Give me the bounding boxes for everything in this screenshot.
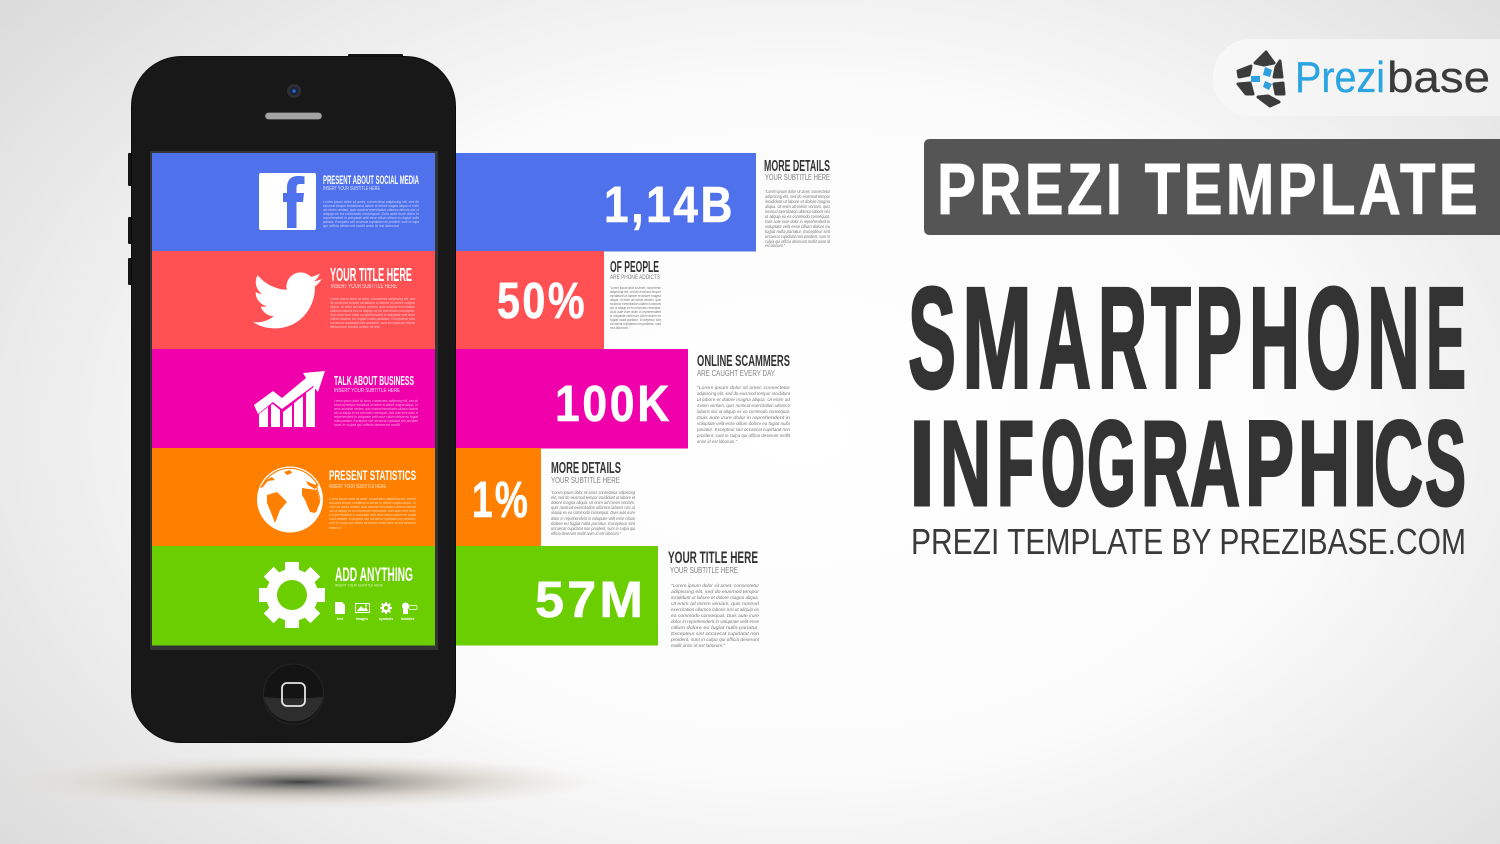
callout: your title here (green): Excepteur sint occaecat cupidatat non [671, 631, 760, 636]
callout: more details (orange): dolore eu fugiat nulla pariatur. Excepteur sint [551, 521, 636, 526]
callout: of people (red): in voluptate velit esse cillum dolore eu [610, 314, 662, 318]
title: A [1190, 395, 1240, 531]
callout: more details (orange): aliquip ex ea commodo consequat. Duis aute irure [551, 510, 635, 515]
callout: more details (orange): MORE DETAILS [551, 460, 621, 477]
panel text [329, 467, 417, 530]
title: H [1249, 258, 1300, 418]
callout: your title here (green) [668, 548, 760, 648]
panel text: Duis aute irure dolor in reprehenderit in voluptate velit esse [330, 313, 415, 317]
panel text: occaecat cupidatat non proident, sunt in culpa qui officia [330, 321, 415, 325]
panel text: Lorem ipsum dolor sit amet, consectetur adipiscing elit, sed do [323, 200, 419, 204]
stat bar: red 50%: 50% [497, 272, 587, 329]
callout: online scammers (magenta): laboris nisi ut aliquip ex ea commodo consequat. [697, 409, 790, 414]
phone body [132, 56, 456, 742]
callout: of people (red): fugiat nulla pariatur. Excepteur sint [610, 318, 662, 322]
callout: more details (orange) [551, 460, 636, 536]
title: P [1245, 395, 1294, 531]
panel text: nulla pariatur. Excepteur sint occaecat cupidatat non proident [334, 419, 419, 423]
icon: facebook [259, 173, 316, 230]
callout: your title here (green): ea commodo consequat. Duis aute irure [671, 613, 760, 618]
panel text: INSERT YOUR SUBTITLE HERE [329, 484, 386, 490]
stat bar: red 50% [440, 251, 604, 350]
stat bar: blue 1,14B: 1,14B [604, 176, 735, 233]
callout: your title here (green): Ut enim ad minim veniam, quis nostrud [671, 601, 760, 606]
panel text: Lorem ipsum dolor sit amet, consectetur adipiscing elit, sed do [334, 399, 418, 403]
panel text [322, 173, 420, 228]
callout: more details (orange): YOUR SUBTITLE HERE [551, 475, 620, 485]
callout: of people (red) [610, 259, 662, 330]
screen frame [150, 151, 438, 650]
panel text [335, 565, 413, 588]
callout: your title here (green): "Lorem ipsum dolor sit amet, consectetur [671, 583, 760, 588]
callout: more details (blue): nostrud exercitation ullamco laboris nisi [765, 209, 831, 214]
panel text: sunt in culpa qui officia deserunt mollit [334, 423, 401, 427]
stat bar: magenta 100K [440, 349, 688, 448]
panel text: enim ad minim veniam, quis nostrud exercitation ullamco laboris [334, 407, 418, 411]
callout: online scammers (magenta): Duis aute irure dolor in reprehenderit in [697, 415, 791, 420]
panel text: INSERT YOUR SUBTITLE HERE [334, 388, 400, 394]
callout: of people (red): aliqua. Ut enim ad minim veniam, quis [610, 298, 661, 302]
callout: online scammers (magenta) [696, 353, 791, 444]
panel text: PRESENT ABOUT SOCIAL MEDIA [323, 173, 419, 187]
title: G [1087, 395, 1136, 531]
title: M [962, 258, 1032, 418]
callout: more details (blue): adipiscing elit, sed do eiusmod tempor [765, 194, 830, 199]
callout: more details (blue): occaecat cupidatat non proident, sunt in [765, 234, 830, 239]
callout: your title here (green): adipiscing elit, sed do eiusmod tempor [671, 589, 760, 594]
stat bar: green 57M [440, 546, 658, 646]
panel text: deserunt mollit anim id est [330, 325, 381, 329]
callout: more details (orange): dolor in reprehenderit in voluptate velit esse cillum [551, 516, 635, 521]
callout: online scammers (magenta): anim id est laborum." [697, 439, 737, 444]
logo background pill [1213, 39, 1500, 116]
callout: your title here (green): YOUR TITLE HERE [668, 548, 758, 567]
title: R [1098, 258, 1147, 418]
stat bar: magenta 100K: 100K [555, 375, 672, 432]
callout: more details (blue): est laborum." [765, 243, 785, 248]
panel text: eiusmod tempor incididunt ut labore et dolore magna aliqua. Ut [334, 403, 419, 407]
panel text: ADD ANYTHING [335, 565, 413, 586]
stat bar: blue 1,14B [440, 153, 756, 252]
panel text: INSERT YOUR SUBTITLE HERE [335, 582, 383, 588]
panel text: ad minim veniam, quis nostrud exercitation ullamco laboris nisi ut [323, 208, 420, 212]
callout: your title here (green): exercitation ullamco laboris nisi ut aliquip ex [671, 607, 760, 612]
phone shadow [0, 755, 600, 809]
panel text: TALK ABOUT BUSINESS [334, 374, 414, 388]
callout: of people (red): occaecat cupidatat non proident, sunt [610, 322, 662, 326]
callout: online scammers (magenta): minim veniam, quis nostrud exercitation ullamco [697, 403, 791, 408]
title: O [1041, 395, 1085, 531]
callout: of people (red): ARE PHONE ADDICTS [610, 274, 660, 281]
colored stat bars [440, 153, 756, 646]
logo: prezibase [1213, 39, 1500, 116]
callout: online scammers (magenta): ARE CAUGHT EVERY DAY [697, 368, 775, 378]
callout: your title here (green): mollit anim id est laborum." [671, 643, 725, 648]
icon: globe [257, 466, 323, 532]
logo wordmark: base [1387, 53, 1490, 102]
camera [287, 84, 301, 98]
callout: online scammers (magenta): voluptate velit esse cillum dolore eu fugiat nulla [697, 421, 791, 426]
icon: twitter bird [253, 272, 322, 328]
callout: more details (blue): aliqua. Ut enim ad minim veniam, quis [765, 204, 831, 209]
panel text: enim ad minim veniam, quis nostrud exercitation ullamco laboris [329, 505, 416, 509]
callout: more details (blue): MORE DETAILS [764, 158, 830, 175]
title: H [1298, 395, 1350, 531]
panel text: nisi ut aliquip ex ea commodo consequat. Duis aute irure dolor in [334, 411, 418, 415]
title: R [1141, 395, 1189, 531]
title [908, 258, 1466, 531]
callout: of people (red): OF PEOPLE [610, 259, 659, 276]
title: I [1352, 395, 1378, 531]
callout: more details (orange): elit, sed do eiusmod tempor incididunt ut labore et [551, 495, 636, 500]
screen panel: business [152, 349, 435, 448]
callout: more details (blue): "Lorem ipsum dolor sit amet, consectetur [765, 189, 830, 194]
callout: online scammers (magenta): pariatur. Excepteur sint occaecat cupidatat non [696, 427, 791, 432]
home button [264, 664, 324, 724]
screen panel: add anything [152, 546, 435, 646]
panel text: YOUR TITLE HERE [330, 265, 412, 285]
panel text: Lorem ipsum dolor sit amet, consectetur adipiscing elit, sed do [329, 497, 416, 501]
icon: gear [259, 562, 325, 628]
title: N [940, 395, 991, 531]
callout: more details (blue): culpa qui officia deserunt mollit anim id [765, 239, 830, 244]
callout: your title here (green): proident, sunt in culpa qui officia deserunt [670, 637, 760, 642]
icon: logo star [1238, 52, 1284, 106]
callout: of people (red): nisi ut aliquip ex ea commodo consequat. [610, 306, 661, 310]
callout: online scammers (magenta): ONLINE SCAMMERS [697, 353, 790, 370]
logo wordmark: Prezi [1295, 53, 1385, 102]
callout: of people (red): adipiscing elit, sed do eiusmod tempor [610, 290, 662, 294]
title: P [1195, 258, 1242, 418]
panel text: ullamco laboris nisi ut aliquip ex ea commodo consequat. [330, 309, 415, 313]
panel text [330, 265, 416, 329]
panel text: in reprehenderit in voluptate velit esse cillum dolore eu fugiat [329, 513, 417, 517]
callout: more details (blue): fugiat nulla pariatur. Excepteur sint [765, 229, 831, 234]
callout: your title here (green): YOUR SUBTITLE HERE [670, 566, 738, 575]
callout: online scammers (magenta): proident, sunt in culpa qui officia deserunt mollit [696, 433, 791, 438]
callout: more details (blue): YOUR SUBTITLE HERE [765, 172, 830, 182]
title: T [1151, 258, 1191, 418]
callout: more details (orange): "Lorem ipsum dolor sit amet, consectetur adipiscing [551, 490, 635, 495]
panel text: nisi ut aliquip ex ea commodo consequat. Duis aute irure dolor [329, 509, 417, 513]
panel text: nulla pariatur. Excepteur sint occaecat cupidatat non proident, [329, 517, 416, 521]
title: N [1367, 258, 1420, 418]
callout: of people (red): "Lorem ipsum dolor sit amet, consectetur [610, 286, 662, 290]
callout: more details (blue): incididunt ut labore et dolore magna [765, 199, 831, 204]
stat bar: green 57M: 57M [535, 571, 646, 628]
callout: more details (blue): Duis aute irure dolor in reprehenderit in [765, 219, 830, 224]
icon: growth chart [254, 371, 325, 427]
title: C [1374, 395, 1423, 531]
callout: of people (red): est laborum." [610, 326, 631, 330]
screen panel: social media [152, 153, 435, 252]
panel text: pariatur. Excepteur sint occaecat cupidatat non proident, sunt in culpa [322, 220, 419, 224]
callout: your title here (green): incididunt ut labore et dolore magna aliqua. [671, 595, 759, 600]
stat bar: orange 1% [440, 448, 541, 546]
screen panel: twitter [152, 251, 435, 350]
icon: text: text [337, 617, 344, 621]
callout: your title here (green): dolor in reprehenderit in voluptate velit esse [671, 619, 760, 624]
panel text: eiusmod tempor incididunt ut labore et dolore magna aliqua. Ut [329, 501, 417, 505]
panel text: aliqua. Ut enim ad minim veniam, quis nostrud exercitation [330, 305, 415, 309]
callout: your title here (green): cillum dolore eu fugiat nulla pariatur. [671, 625, 759, 630]
title: O [1306, 258, 1361, 418]
title: S [908, 258, 956, 418]
stat bar: orange 1%: 1% [472, 471, 530, 528]
title: I [909, 395, 935, 531]
speaker [265, 112, 322, 120]
icon row: content types [335, 602, 417, 621]
panel text: Lorem ipsum dolor sit amet, consectetur adipiscing elit, sed [330, 297, 416, 301]
callout: more details (blue): voluptate velit esse cillum dolore eu [765, 224, 831, 229]
callout: of people (red): nostrud exercitation ullamco laboris [610, 302, 661, 306]
callout: of people (red): incididunt ut labore et dolore magna [610, 294, 661, 298]
panel text: eiusmod tempor incididunt ut labore et dolore magna aliqua ut enim [323, 204, 419, 208]
panel text: sunt in culpa qui officia deserunt mollit anim id est laborum [329, 521, 416, 525]
icon: images: images [356, 617, 368, 621]
callout: more details (orange): officia deserunt mollit anim id est laborum." [551, 531, 621, 536]
callout: online scammers (magenta): adipiscing elit, sed do eiusmod tempor incididunt [697, 391, 791, 396]
callout: more details (blue): ut aliquip ex ea commodo consequat. [765, 214, 830, 219]
panel text: INSERT YOUR SUBTITLE HERE [331, 284, 397, 290]
callout: more details (orange): quis nostrud exercitation ullamco laboris nisi ut [551, 505, 636, 510]
panel text: aliquip ex ea commodo consequat. Duis aute irure dolor in [323, 212, 419, 216]
phone side buttons [128, 54, 403, 285]
panel text: do eiusmod tempor incididunt ut labore et dolore magna [330, 301, 415, 305]
callout: online scammers (magenta): "Lorem ipsum dolor sit amet, consectetur [697, 385, 791, 390]
panel text: cillum dolore eu fugiat nulla pariatur. Excepteur sint [330, 317, 416, 321]
panel text: laborum [329, 526, 341, 530]
panel text: reprehenderit in voluptate velit esse cillum dolore eu fugiat [334, 415, 419, 419]
panel text [334, 374, 419, 427]
callout: of people (red): Duis aute irure dolor in reprehenderit [610, 310, 662, 314]
panel text: INSERT YOUR SUBTITLE HERE [323, 186, 380, 192]
callout: more details (blue) [764, 158, 831, 248]
callout: more details (orange): occaecat cupidatat non proident, sunt in culpa qui [551, 526, 636, 531]
icon: symbols: symbols [379, 617, 393, 621]
phone [128, 54, 456, 742]
panel text: qui officia deserunt mollit anim id est laborum [323, 224, 399, 228]
callout: more details (orange): dolore magna aliqua. Ut enim ad minim veniam, [551, 500, 635, 505]
screen panel: statistics [152, 448, 435, 546]
title: F [997, 395, 1034, 531]
panel text: reprehenderit in voluptate velit esse cillum dolore eu fugiat nulla [323, 216, 419, 220]
callout: online scammers (magenta): ut labore et dolore magna aliqua. Ut enim ad [697, 397, 791, 402]
icon: bubbles: bubbles [401, 617, 414, 621]
panel text: PRESENT STATISTICS [329, 467, 416, 483]
title: A [1039, 258, 1091, 418]
